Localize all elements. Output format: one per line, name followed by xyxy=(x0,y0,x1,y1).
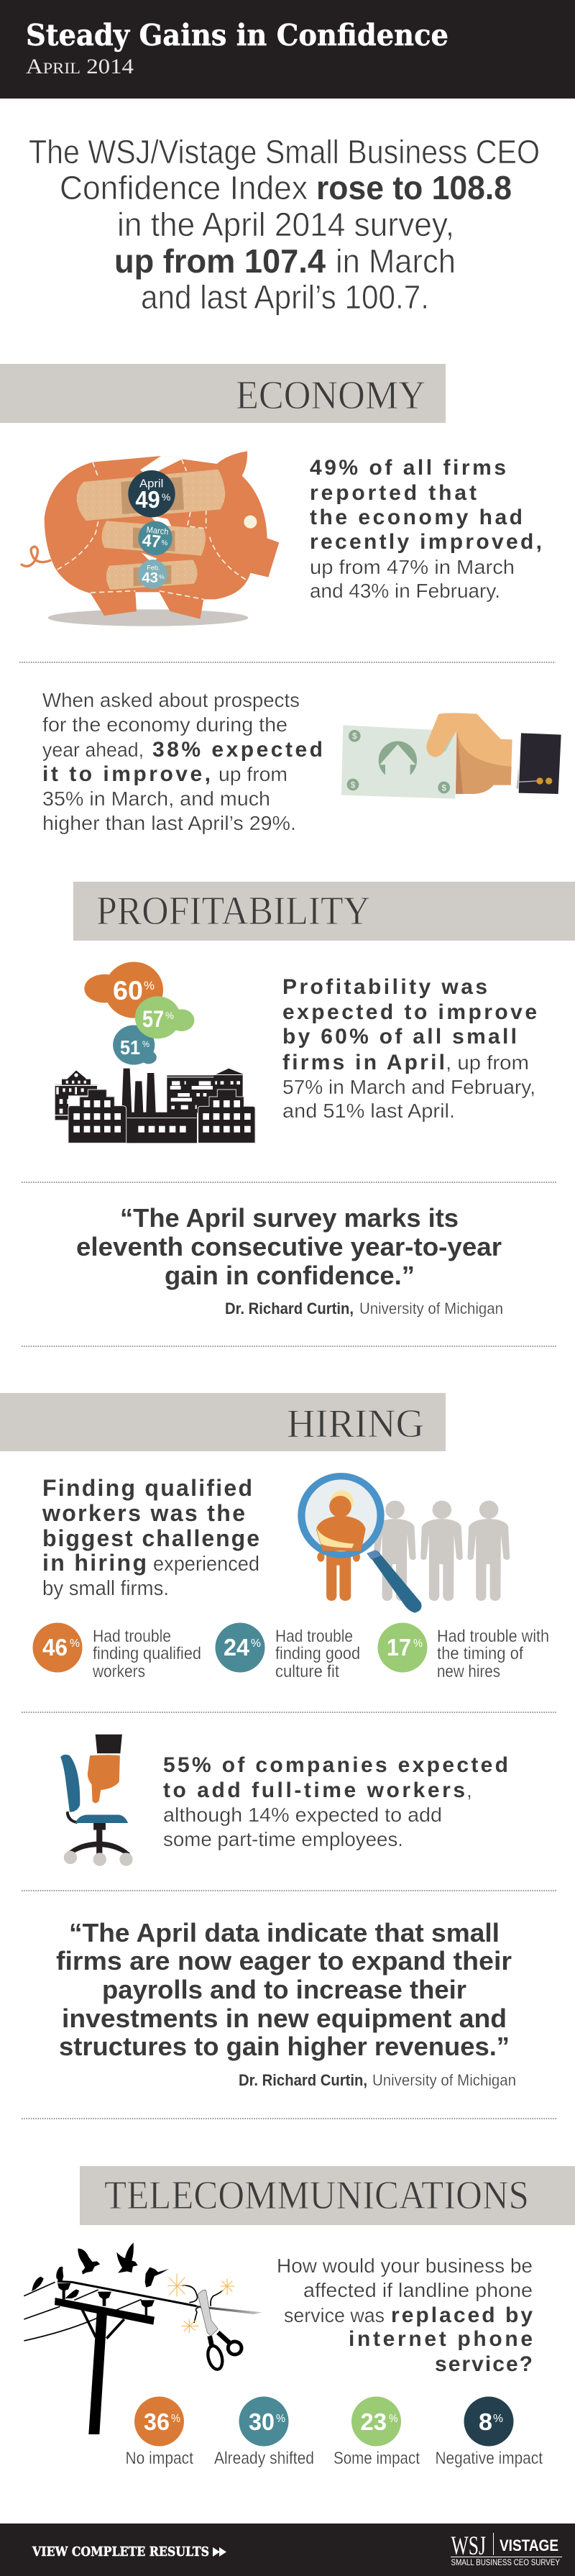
heading: profitability: PROFITABILITY xyxy=(96,889,370,933)
text: telecom question: affected if landline phone xyxy=(303,2279,533,2301)
quote: eager to expand: payrolls and to increase their xyxy=(102,1975,466,2004)
icon: smoke clouds with percentages: 57 xyxy=(142,1006,164,1032)
intro text: in the April 2014 survey, xyxy=(117,206,454,243)
heading: profitability xyxy=(73,882,575,941)
quote: eleventh consecutive gain: “The April survey marks its xyxy=(120,1203,459,1233)
stat: 24 percent: finding good xyxy=(275,1644,360,1663)
icon: bandaged piggy bank: % xyxy=(161,539,168,547)
stat: 46 percent xyxy=(33,1622,201,1681)
text: finding qualified workers: workers was the xyxy=(42,1500,245,1526)
quote: eager to expand: Dr. Richard Curtin, xyxy=(239,2071,367,2089)
quote: eager to expand: investments in new equipment and xyxy=(62,2004,507,2033)
logo: WSJ xyxy=(451,2531,486,2561)
intro text xyxy=(29,133,540,316)
stat: 46 percent: % xyxy=(70,1638,80,1650)
icon: hand holding bill: $ xyxy=(441,782,446,793)
quote: eager to expand: University of Michigan xyxy=(372,2071,516,2089)
text: full-time workers: although 14% expected to add xyxy=(163,1804,442,1826)
text: economy improved: up from 47% in March xyxy=(310,556,515,578)
stat: already shifted xyxy=(214,2396,314,2468)
icon: hand pointing at empty chair xyxy=(60,1735,133,1866)
text: economy improved: the economy had xyxy=(310,506,523,529)
text: economy prospects: up from xyxy=(218,763,288,785)
stat: negative impact: % xyxy=(493,2413,503,2425)
text: finding qualified workers: experienced xyxy=(153,1553,259,1576)
text: economy prospects: 35% in March, and much xyxy=(42,787,270,810)
intro text: rose to 108.8 xyxy=(316,169,512,206)
icon: smoke clouds with percentages xyxy=(84,962,194,1065)
icon: factory skyline xyxy=(55,1069,255,1143)
stat: some impact xyxy=(334,2396,420,2468)
text: economy prospects: it to improve, xyxy=(42,762,211,786)
text: profitability xyxy=(282,975,537,1122)
text: profitability: expected to improve xyxy=(282,1000,537,1024)
text: economy improved xyxy=(310,456,542,602)
arrow icon xyxy=(213,2547,226,2557)
heading: hiring: HIRING xyxy=(287,1402,424,1446)
stat: 24 percent: Had trouble xyxy=(275,1627,353,1646)
stat: 46 percent: workers xyxy=(92,1662,145,1681)
stat: 46 percent: finding qualified xyxy=(93,1644,201,1663)
icon: smoke clouds with percentages: % xyxy=(144,979,155,992)
stat: negative impact: Negative impact xyxy=(436,2449,543,2468)
text: profitability: , up from xyxy=(446,1051,529,1074)
text: full-time workers xyxy=(163,1753,508,1850)
quote: eleventh consecutive gain xyxy=(76,1203,503,1317)
text: profitability: Profitability was xyxy=(282,975,487,999)
stat: 17 percent: Had trouble with xyxy=(437,1627,549,1646)
icon: smoke clouds with percentages: % xyxy=(165,1010,174,1021)
icon: smoke clouds with percentages: 60 xyxy=(113,976,143,1005)
text: telecom question: replaced by xyxy=(391,2303,533,2327)
icon: smoke clouds with percentages: % xyxy=(142,1039,150,1049)
stat: negative impact: 8 xyxy=(479,2408,492,2435)
icon: bandaged piggy bank: 47 xyxy=(142,531,162,552)
icon: bandaged piggy bank xyxy=(22,451,279,626)
stat: 17 percent: 17 xyxy=(387,1634,411,1661)
text: profitability: firms in April xyxy=(282,1051,445,1074)
text: economy improved: 49% of all firms xyxy=(310,456,506,480)
stat: 24 percent: % xyxy=(251,1638,261,1650)
text: full-time workers: to add full-time workers xyxy=(163,1778,465,1802)
stat: 24 percent: culture fit xyxy=(275,1662,339,1681)
icon: bandaged piggy bank: April xyxy=(139,478,163,490)
icon: bandaged piggy bank: % xyxy=(162,491,170,503)
header band xyxy=(0,0,575,99)
footer band xyxy=(0,2524,575,2576)
stat: 46 percent: Had trouble xyxy=(93,1627,171,1646)
text: profitability: 57% in March and February, xyxy=(282,1076,535,1098)
text: economy prospects: for the economy during the xyxy=(42,713,288,736)
stat: no impact: % xyxy=(171,2413,180,2425)
stat: already shifted: 30 xyxy=(249,2408,275,2435)
icon: bandaged piggy bank: March xyxy=(146,524,169,536)
date: APRIL 2014 xyxy=(26,55,134,78)
text: economy prospects: year ahead, xyxy=(42,739,144,761)
quote: eager to expand xyxy=(56,1918,516,2089)
text: economy prospects xyxy=(42,689,323,834)
stat: no impact: 36 xyxy=(144,2408,170,2435)
logo xyxy=(451,2531,562,2567)
stat: 17 percent xyxy=(378,1622,549,1681)
icon: bandaged piggy bank: 43 xyxy=(142,570,158,586)
stat: 24 percent: 24 xyxy=(224,1634,250,1661)
text: full-time workers: 55% of companies expected xyxy=(163,1753,508,1777)
heading: telecommunications: TELECOMMUNICATIONS xyxy=(104,2173,529,2218)
intro text: Confidence Index xyxy=(60,169,308,206)
text: finding qualified workers: biggest challenge xyxy=(42,1525,259,1551)
title: Steady Gains in Confidence xyxy=(26,18,448,52)
stat: no impact xyxy=(125,2396,193,2468)
stat: 17 percent: new hires xyxy=(437,1662,500,1681)
stat: negative impact xyxy=(436,2396,543,2468)
stat: some impact: Some impact xyxy=(334,2449,420,2468)
icon: magnifier over workers xyxy=(298,1473,510,1613)
stat: some impact: 23 xyxy=(361,2408,387,2435)
icon: smoke clouds with percentages: 51 xyxy=(120,1036,140,1059)
text: profitability: and 51% last April. xyxy=(282,1100,455,1122)
text: full-time workers: , xyxy=(466,1779,472,1801)
text: finding qualified workers: in hiring xyxy=(42,1550,147,1576)
text: telecom question: service? xyxy=(435,2352,533,2376)
text: economy prospects: When asked about prospects xyxy=(42,689,300,711)
quote: eleventh consecutive gain: Dr. Richard Curtin, xyxy=(225,1300,354,1317)
heading: economy: ECONOMY xyxy=(236,373,426,418)
text: telecom question: How would your business be xyxy=(277,2255,533,2277)
stat: already shifted: % xyxy=(276,2413,285,2425)
icon: bandaged piggy bank: Feb. xyxy=(147,564,160,571)
quote: eager to expand: firms are now eager to expand their xyxy=(56,1946,512,1976)
text: full-time workers: some part-time employees. xyxy=(163,1828,403,1850)
text: telecom question: internet phone xyxy=(349,2327,533,2351)
icon: hand holding bill: $ xyxy=(352,731,357,741)
text: telecom question: service was xyxy=(284,2304,385,2326)
stat: 17 percent: the timing of xyxy=(437,1644,523,1663)
intro text: and last April’s 100.7. xyxy=(141,278,429,316)
stat: 17 percent: % xyxy=(413,1638,423,1650)
text: finding qualified workers: Finding qualified xyxy=(42,1475,252,1501)
stat: some impact: % xyxy=(389,2413,398,2425)
intro text: in March xyxy=(336,242,456,280)
quote: eager to expand: structures to gain higher revenues.” xyxy=(59,2032,510,2061)
stat: no impact: No impact xyxy=(125,2449,193,2468)
link text: VIEW COMPLETE RESULTS xyxy=(32,2544,209,2559)
text: economy improved: and 43% in February. xyxy=(310,580,500,602)
icon: bandaged piggy bank: 49 xyxy=(135,487,160,513)
text: profitability: by 60% of all small xyxy=(282,1025,517,1049)
text: finding qualified workers xyxy=(42,1475,259,1600)
icon: bandaged piggy bank: % xyxy=(159,573,165,580)
text: economy improved: reported that xyxy=(310,481,477,505)
text: economy prospects: higher than last April’s 29%. xyxy=(42,812,296,834)
heading: hiring xyxy=(0,1393,446,1451)
stat: 46 percent: 46 xyxy=(42,1634,68,1661)
icon: hand holding bill xyxy=(341,713,561,799)
text: telecom question xyxy=(277,2255,533,2376)
intro text: up from 107.4 xyxy=(114,242,326,280)
text: finding qualified workers: by small firms. xyxy=(42,1577,169,1600)
stat: 24 percent xyxy=(216,1622,360,1681)
text: economy prospects: 38% expected xyxy=(152,738,323,762)
logo: VISTAGE xyxy=(500,2536,558,2554)
quote: eleventh consecutive gain: eleventh consecutive year-to-year xyxy=(76,1232,502,1261)
text: economy improved: recently improved, xyxy=(310,530,542,554)
heading: economy xyxy=(0,364,446,423)
icon: hand holding bill: $ xyxy=(351,780,356,790)
quote: eager to expand: “The April data indicate that small xyxy=(69,1918,500,1947)
quote: eleventh consecutive gain: University of Michigan xyxy=(359,1300,503,1317)
stat: already shifted: Already shifted xyxy=(214,2449,314,2468)
quote: eleventh consecutive gain: gain in confidence.” xyxy=(165,1261,415,1290)
icon: telephone pole, birds and scissors xyxy=(24,2242,262,2434)
